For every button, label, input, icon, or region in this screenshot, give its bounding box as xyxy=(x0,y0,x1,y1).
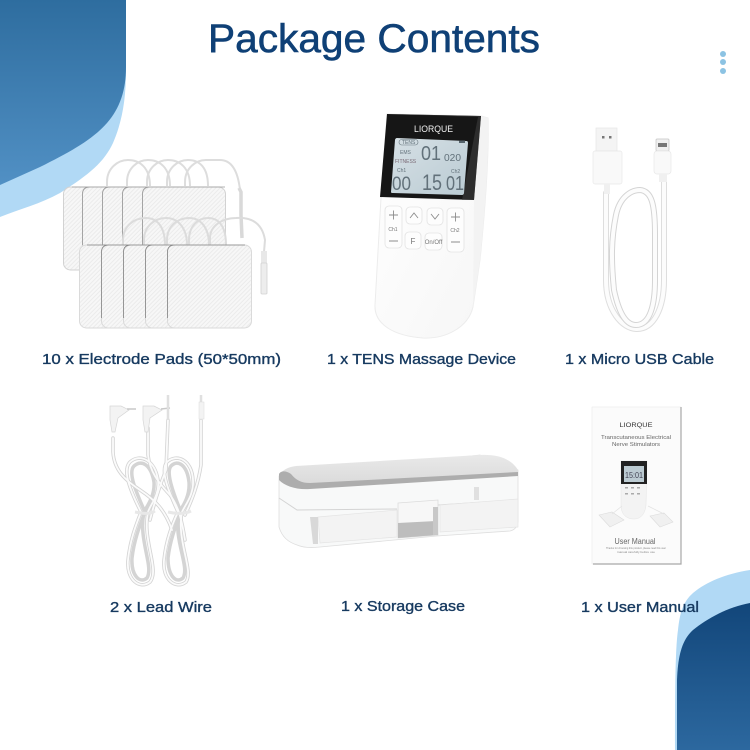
front row wires xyxy=(123,218,265,252)
user manual: manual carefully before use xyxy=(617,551,656,554)
label: cable: 1 x Micro USB Cable xyxy=(565,352,714,368)
case seam xyxy=(279,498,518,510)
wire ends xyxy=(168,395,201,420)
menu dots xyxy=(720,51,726,74)
front connector xyxy=(261,251,267,265)
device body xyxy=(375,114,488,338)
device buttons xyxy=(385,206,464,252)
case windows xyxy=(318,510,397,543)
TENS massage device: F xyxy=(411,237,416,246)
label: lead wire: 2 x Lead Wire xyxy=(110,600,212,616)
lcd xyxy=(391,138,468,195)
lcd readings: 15 xyxy=(422,170,442,195)
title: Package Contents xyxy=(208,17,540,61)
lcd readings: FITNESS xyxy=(395,159,417,165)
manual page xyxy=(592,407,681,564)
USB-A plug xyxy=(596,128,617,151)
micro USB cable xyxy=(593,128,671,329)
back row pads xyxy=(64,187,226,270)
lcd readings: TENS xyxy=(402,140,416,146)
top-left corner decoration xyxy=(0,0,126,217)
lcd readings: EMS xyxy=(400,150,412,156)
lcd readings: 00 xyxy=(392,174,411,195)
lcd readings: Ch2 xyxy=(451,169,460,175)
wire coils xyxy=(113,420,201,585)
lcd readings: Ch1 xyxy=(397,168,406,174)
user manual xyxy=(592,407,681,564)
case base xyxy=(279,455,518,548)
TENS massage device: Ch1 xyxy=(388,227,398,233)
lcd readings: 01 xyxy=(421,143,441,165)
button symbols xyxy=(389,210,460,242)
device screen bezel xyxy=(380,114,481,200)
item labels xyxy=(42,352,714,616)
manual illustration xyxy=(621,461,647,519)
user manual: Nerve Stimulators xyxy=(612,442,660,448)
lcd readings: 020 xyxy=(444,153,461,164)
user manual: Transcutaneous Electrical xyxy=(601,435,671,441)
user manual: Thanks for choosing this product, please read this user xyxy=(606,547,666,550)
latch xyxy=(398,500,438,538)
case lid xyxy=(279,455,518,487)
back row wires xyxy=(107,160,240,190)
label: user manual: 1 x User Manual xyxy=(581,600,699,616)
bottom-right corner decoration xyxy=(675,570,750,750)
lead wires xyxy=(110,395,204,585)
back connector xyxy=(239,188,242,238)
label: storage case: 1 x Storage Case xyxy=(341,599,465,615)
label: device: 1 x TENS Massage Device xyxy=(327,352,516,368)
storage case xyxy=(279,455,518,548)
brand: LIORQUE xyxy=(414,124,453,134)
manual text: LIORQUE xyxy=(620,422,653,429)
user manual: User Manual xyxy=(614,537,656,546)
wire ties xyxy=(135,511,191,513)
micro USB plug xyxy=(656,139,669,151)
right-angle jacks xyxy=(110,406,129,432)
label: electrode pads: 10 x Electrode Pads (50*50mm) xyxy=(42,352,281,368)
cable loop xyxy=(606,181,664,329)
lcd readings: 01 xyxy=(446,173,464,195)
user manual: 15:01 xyxy=(625,471,643,480)
TENS massage device xyxy=(375,114,488,338)
front row pads xyxy=(80,245,252,328)
electrode pads xyxy=(64,160,267,328)
lid rim xyxy=(279,471,518,489)
TENS massage device: Ch2 xyxy=(450,228,460,234)
lcd readings xyxy=(392,140,465,195)
TENS massage device: On/Off xyxy=(425,240,443,246)
